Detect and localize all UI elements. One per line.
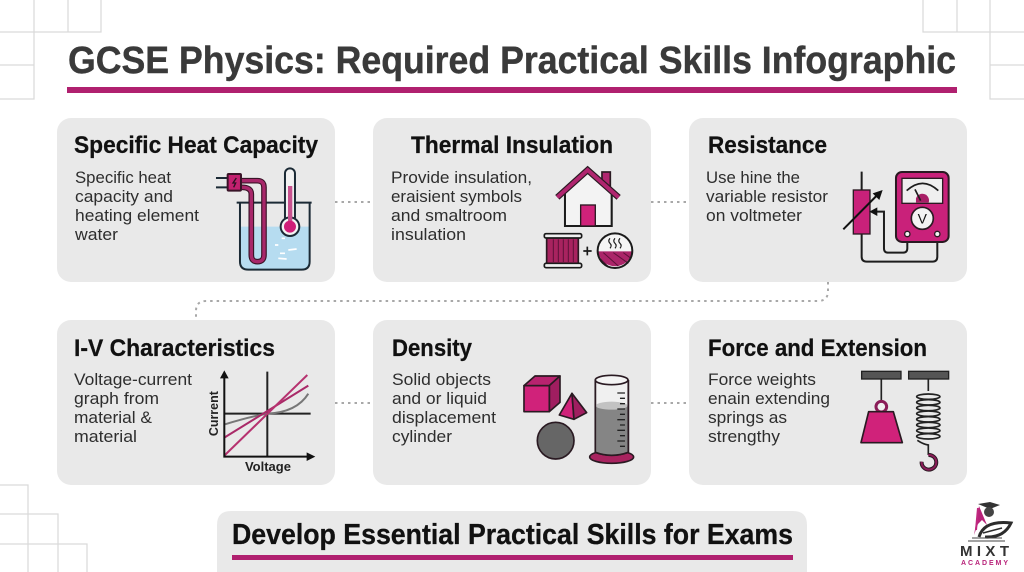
text: resistance description: Use hine the xyxy=(706,169,800,187)
text: density description: and or liquid xyxy=(392,390,487,408)
text: force description xyxy=(708,371,830,446)
text: specific heat description: Specific heat xyxy=(75,169,171,187)
text: thermal insulation description: and smaltroom xyxy=(391,207,507,225)
text: specific heat description: heating element xyxy=(75,207,199,225)
text: I-V description: graph from xyxy=(74,390,159,408)
text: force description: springs as xyxy=(708,409,787,427)
icon: solid shapes and measuring cylinder xyxy=(524,375,634,463)
logo: MIXT Academy: MIXT xyxy=(960,543,1009,560)
icon: variable resistor and voltmeter xyxy=(843,172,949,262)
panel: I-V characteristics xyxy=(57,320,335,485)
chart: current against voltage: Current xyxy=(207,390,221,436)
text: I-V description xyxy=(74,371,192,446)
logo: MIXT Academy xyxy=(960,502,1011,567)
text: specific heat description xyxy=(74,169,199,244)
heading: force and extension: Force and Extension xyxy=(708,335,927,362)
icon: hanging weight and spring xyxy=(861,371,949,470)
text: I-V description: material & xyxy=(74,409,152,427)
text: thermal insulation description: Provide insulation, xyxy=(391,169,532,187)
text: force description: Force weights xyxy=(708,371,816,389)
panel: specific heat capacity xyxy=(57,118,335,282)
icon: variable resistor and voltmeter: V xyxy=(918,210,928,226)
heading: specific heat capacity: Specific Heat Capacity xyxy=(74,132,318,159)
title: GCSE Physics: Required Practical Skills Infographic xyxy=(68,40,956,82)
text: density description: cylinder xyxy=(392,428,453,446)
text: resistance description xyxy=(706,169,829,225)
chart: current against voltage xyxy=(207,370,315,474)
panel: density xyxy=(373,320,651,485)
panel: force and extension xyxy=(689,320,967,485)
banner: call to action xyxy=(217,511,807,572)
text: density description: Solid objects xyxy=(392,371,491,389)
text: specific heat description: water xyxy=(74,226,119,244)
banner text: Develop Essential Practical Skills for Exams xyxy=(232,519,793,551)
heading: I-V characteristics: I-V Characteristics xyxy=(74,335,275,362)
banner underline xyxy=(232,555,793,560)
text: I-V description: Voltage-current xyxy=(74,371,192,389)
connectors between panels xyxy=(196,202,828,403)
heading: resistance: Resistance xyxy=(708,132,827,159)
text: density description: displacement xyxy=(392,409,496,427)
icon: house with insulation xyxy=(544,170,632,268)
title underline xyxy=(67,87,957,93)
panel: resistance xyxy=(689,118,967,282)
text: force description: strengthy xyxy=(708,428,781,446)
text: resistance description: on voltmeter xyxy=(706,207,803,225)
heading: thermal insulation: Thermal Insulation xyxy=(411,132,613,159)
text: force description: enain extending xyxy=(708,390,830,408)
text: specific heat description: capacity and xyxy=(75,188,173,206)
chart: current against voltage: Voltage xyxy=(245,460,291,474)
logo: MIXT Academy: ACADEMY xyxy=(961,560,1008,567)
text: density description xyxy=(392,371,496,446)
text: thermal insulation description xyxy=(391,169,532,244)
text: thermal insulation description: insulation xyxy=(391,226,466,244)
panel: thermal insulation xyxy=(373,118,651,282)
text: resistance description: variable resistor xyxy=(706,188,829,206)
text: I-V description: material xyxy=(74,428,137,446)
icon: beaker with heater and thermometer xyxy=(216,168,312,270)
heading: density: Density xyxy=(392,335,472,362)
text: thermal insulation description: eraisient symbols xyxy=(391,188,522,206)
